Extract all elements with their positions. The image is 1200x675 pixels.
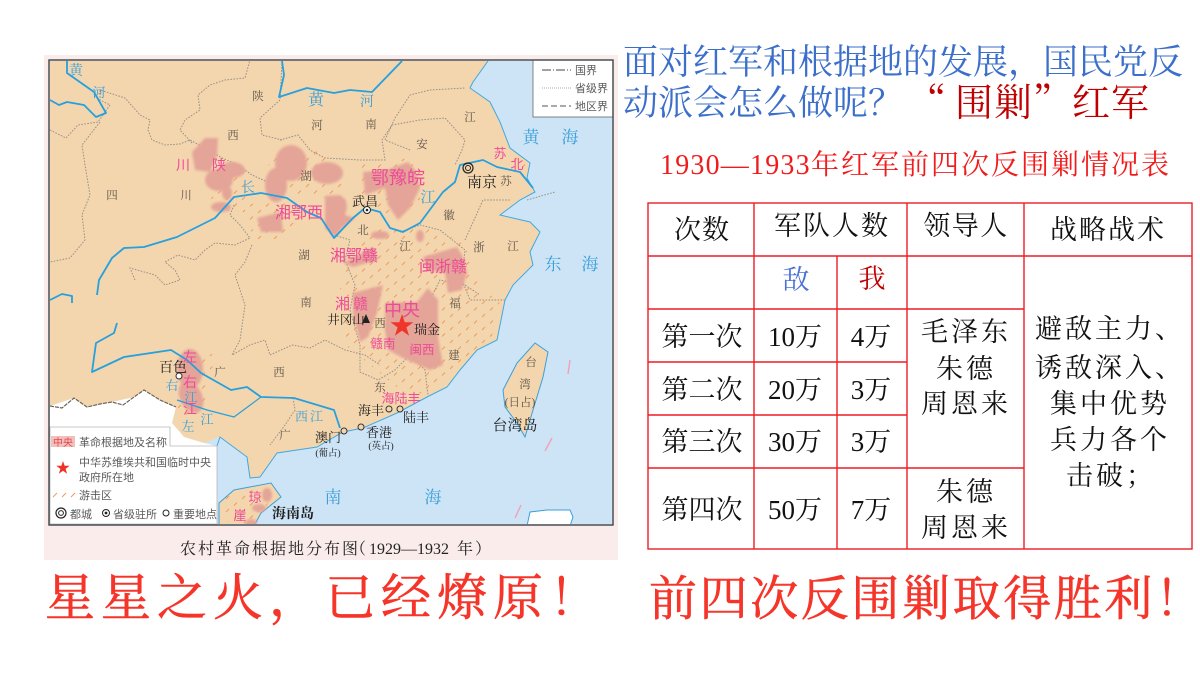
panel: map with caption [44, 55, 618, 560]
Taiwan island [503, 343, 548, 437]
map place labels: 广 [279, 428, 291, 442]
map place labels: 瑞金 [414, 322, 440, 337]
map place labels: 海丰 [358, 403, 384, 418]
legend: symbols [50, 427, 217, 524]
map place labels: 河 [360, 94, 374, 110]
table rows: campaign data: 第三次 [662, 427, 742, 457]
map place labels: 北 [357, 224, 369, 237]
national border [50, 390, 176, 408]
map place labels: 左 [183, 349, 197, 365]
map place labels: 广 [214, 365, 226, 379]
map place labels: 台湾岛 [492, 416, 538, 434]
map place labels: 台 [525, 355, 537, 369]
map caption: （ [350, 536, 366, 559]
icon: star marking Ruijin [391, 314, 413, 336]
map place labels: 南京 [467, 174, 497, 191]
map place labels: 赣南 [370, 336, 396, 351]
table: four counter-encirclement campaigns [648, 203, 1192, 549]
table column: strategy and tactics: 兵力各个 [1050, 425, 1170, 455]
foreign territory and legend backing [50, 390, 216, 446]
map place labels: 苏 [493, 146, 507, 161]
map place labels: 江 [420, 189, 436, 206]
table header row: 战略战术 [1050, 215, 1166, 245]
table subheader: enemy and own forces: 我 [858, 264, 886, 294]
map place labels: 海南岛 [272, 505, 314, 522]
map place labels: 江 [200, 412, 214, 427]
table column: strategy and tactics [1035, 314, 1185, 491]
heading: question about the Nationalist response: 面对红军和根据地的发展，国民党反 [623, 43, 1183, 82]
map place labels: 井冈山 [327, 312, 365, 327]
table column: leaders [921, 317, 1011, 543]
rivers [50, 61, 533, 428]
land mass [50, 61, 540, 478]
legend: symbols: 省级驻所 [113, 507, 157, 521]
legend: symbols: 重要地点 [173, 507, 217, 521]
map place labels: 百色 [159, 360, 187, 376]
table rows: campaign data: 10万 [768, 322, 822, 352]
map place labels: 徽 [443, 208, 455, 222]
table column: strategy and tactics: 击破； [1066, 461, 1156, 491]
table header row [674, 211, 1166, 245]
map place labels: 福 [449, 297, 461, 310]
table rows: campaign data: 30万 [768, 427, 822, 457]
legend: symbols: 中央 [53, 436, 73, 449]
map place labels: 湘赣 [335, 296, 371, 313]
map place labels: 黄 [69, 63, 84, 79]
table subheader: enemy and own forces: 敌 [782, 265, 810, 295]
map place labels: 海 [582, 255, 598, 274]
map place labels: 陕 [252, 89, 264, 103]
map caption [180, 536, 491, 559]
map place labels: 河 [311, 119, 323, 132]
map place labels: 川 [180, 189, 192, 202]
map place labels: 河 [92, 85, 106, 100]
table title: 年红军前四次反围剿情况表 [811, 149, 1171, 181]
map caption: ） [475, 536, 491, 559]
map place labels: 澳门 [315, 430, 341, 445]
table column: leaders: 朱德 [936, 477, 996, 507]
map place labels: 江 [183, 401, 197, 417]
map place labels: 湾 [519, 377, 531, 391]
Hainan island [219, 483, 281, 526]
map place labels: (日占) [505, 395, 535, 409]
table column: strategy and tactics: 集中优势 [1050, 389, 1170, 419]
table subheader: enemy and own forces [782, 264, 886, 295]
map place labels: 黄 [522, 128, 540, 147]
map place labels: 海 [424, 488, 442, 507]
map caption: 1929—1932 [369, 541, 449, 558]
map frame [49, 60, 613, 525]
heading: encirclement answer: “围剿”红军 [908, 72, 1149, 127]
table header row: 次数 [674, 215, 730, 245]
map place labels: 江 [464, 111, 476, 124]
map place labels: 崖 [233, 508, 247, 523]
map place labels: 四 [106, 189, 118, 202]
legend: symbols: 中华苏维埃共和国临时中央 [79, 455, 211, 469]
legend: symbols: 革命根据地及名称 [79, 435, 167, 449]
table column: leaders: 周恩来 [921, 513, 1011, 543]
map place labels: 左 [181, 419, 195, 434]
table rows: campaign data: 3万 [851, 375, 891, 405]
provincial borders [50, 60, 555, 445]
map caption: 年 [457, 539, 473, 558]
map place labels: 建 [448, 348, 460, 362]
legend: symbols: 游击区 [79, 489, 112, 502]
map place labels: 西 [273, 366, 285, 379]
legend: symbols: 政府所在地 [79, 470, 134, 484]
heading: question about the Nationalist response: 动派会怎么做呢？ [623, 84, 903, 123]
map place labels: 西江 [295, 409, 325, 424]
map place labels: 南 [300, 296, 312, 309]
map place labels: (英占) [368, 440, 394, 452]
table rows: campaign data: 第四次 [662, 495, 742, 525]
slogan: a single spark: 星星之火，已经燎原！ [45, 570, 605, 626]
map place labels: 武昌 [352, 194, 378, 209]
map place labels: 海陆丰 [381, 391, 421, 406]
map place labels: 黄 [308, 90, 325, 109]
map place labels: 湖 [300, 169, 312, 183]
map place labels: 川 [176, 157, 190, 173]
map place labels: 江 [184, 390, 198, 405]
table header row: 领导人 [923, 211, 1009, 241]
legend: line types [533, 60, 613, 117]
table rows: campaign data: 第二次 [662, 375, 742, 405]
table title [660, 149, 1171, 181]
map place labels: 湘鄂西 [275, 204, 323, 222]
map place labels: 湖 [298, 248, 310, 262]
table rows: campaign data: 4万 [851, 322, 891, 352]
table column: strategy and tactics: 诱敌深入、 [1035, 353, 1185, 383]
table column: leaders: 毛泽东 [921, 317, 1011, 347]
map place labels: 南 [365, 118, 377, 131]
map place labels: 鄂豫皖 [371, 168, 425, 188]
map place labels: 北 [510, 157, 524, 172]
map place labels: 右 [183, 374, 197, 390]
map place labels: 东 [374, 381, 386, 394]
map place labels: 浙 [473, 240, 485, 254]
map caption: 农村革命根据地分布图 [180, 539, 360, 558]
table column: strategy and tactics: 避敌主力、 [1035, 314, 1185, 344]
map place labels [69, 63, 598, 523]
map place labels: (葡占) [315, 447, 341, 459]
table rows: campaign data: 7万 [851, 495, 891, 525]
map place labels: 湘鄂赣 [330, 247, 378, 265]
legend: line types: 地区界 [575, 100, 608, 113]
map place labels: 南 [324, 488, 342, 507]
map place labels: 西 [227, 129, 239, 142]
table rows: campaign data: 3万 [851, 427, 891, 457]
map: rural revolutionary base areas [50, 60, 612, 527]
coastline [217, 61, 540, 478]
table column: leaders: 朱德 [936, 354, 996, 384]
map place labels: 安 [416, 137, 428, 151]
table column: leaders: 周恩来 [921, 389, 1011, 419]
heading: question about the Nationalist response [623, 43, 1183, 127]
map place labels: 江 [399, 240, 411, 253]
slogan: first four campaigns won: 前四次反围剿取得胜利！ [649, 573, 1200, 626]
map place labels: 西 [374, 317, 386, 330]
table header row: 军队人数 [774, 211, 890, 241]
table rows: campaign data: 50万 [768, 495, 822, 525]
table rows: campaign data: 第一次 [662, 322, 742, 352]
legend: line types: 省级界 [575, 82, 608, 95]
map place labels: 香港 [366, 425, 392, 440]
map place labels: 闽西 [409, 343, 435, 357]
map place labels: 长 [241, 180, 255, 196]
map place labels: 陆丰 [403, 410, 429, 425]
Philippines landmass [527, 510, 573, 526]
South China Sea dash marks [515, 360, 570, 518]
legend: line types: 国界 [575, 64, 597, 77]
map place labels: 陕 [212, 157, 226, 173]
guerrilla zones hatch [175, 148, 532, 523]
map place labels: 琼 [248, 490, 262, 505]
map place labels: 苏 [500, 174, 512, 188]
map place labels: 中央 [384, 300, 420, 320]
map place labels: 江 [507, 240, 519, 253]
revolutionary base areas [174, 138, 467, 527]
map place labels: 海 [562, 128, 578, 147]
table rows: campaign data [662, 322, 891, 525]
map place labels: 右 [165, 378, 179, 393]
map place labels: 闽浙赣 [419, 258, 467, 276]
table rows: campaign data: 20万 [768, 375, 822, 405]
legend: symbols: 都城 [70, 508, 92, 521]
table title: 1930—1933 [660, 150, 811, 181]
map place labels: 东 [544, 255, 562, 274]
